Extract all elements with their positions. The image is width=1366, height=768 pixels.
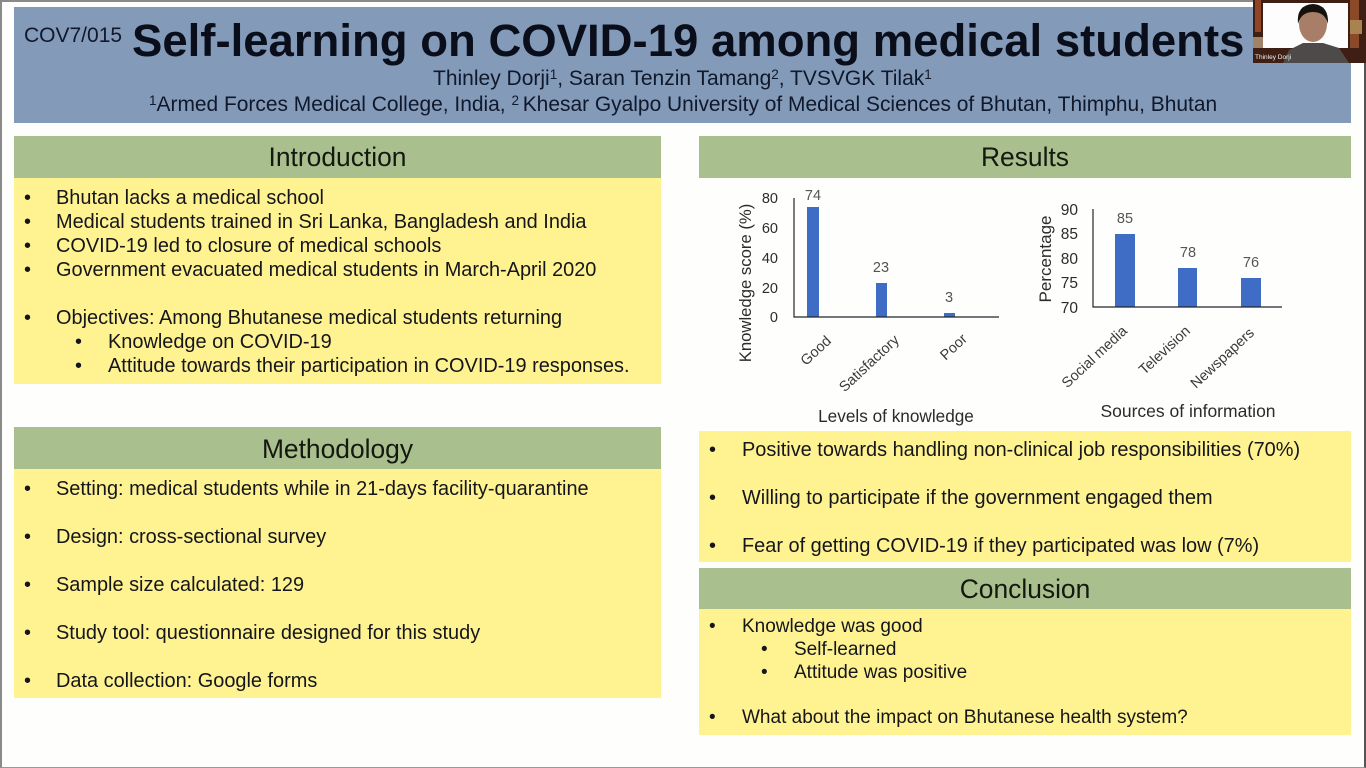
heading: methodology: Methodology [262,434,413,464]
bar chart: levels of knowledge: Knowledge score (%) [736,204,755,362]
bar chart: sources of information: 75 [1061,275,1078,292]
bar chart: sources of information: 70 [1061,300,1078,317]
bar chart: levels of knowledge: 60 [762,221,778,237]
introduction text block: Government evacuated medical students in March-April 2020 [56,259,596,281]
introduction text block: • [75,331,82,353]
bar chart: sources of information: 76 [1243,255,1259,271]
heading: conclusion: Conclusion [960,574,1090,604]
introduction text block: Objectives: Among Bhutanese medical students returning [56,307,562,329]
heading: results [699,136,1351,178]
heading: introduction [14,136,661,178]
bar chart: sources of information: 85 [1061,226,1078,243]
introduction text block: COVID-19 led to closure of medical schools [56,235,441,257]
title: Self-learning on COVID-19 among medical students [132,15,1244,66]
introduction text block: Medical students trained in Sri Lanka, Bangladesh and India [56,211,586,233]
bar chart: sources of information: 80 [1061,251,1078,268]
bar chart: levels of knowledge: Levels of knowledge [818,406,974,426]
panel: introduction [14,136,661,384]
results text block: • [709,487,716,509]
heading: introduction: Introduction [269,142,406,172]
conclusion text block: Knowledge was good [742,616,923,637]
conclusion text block [699,609,1351,735]
results text block: Willing to participate if the government engaged them [742,487,1213,509]
methodology text block: • [24,574,31,596]
bar chart: sources of information: Television [1136,323,1194,378]
icon: presenter webcam: Thinley Dorji [1255,54,1291,61]
methodology text block: • [24,526,31,548]
conclusion text block: • [761,639,768,660]
introduction text block: • [24,187,31,209]
introduction text block: • [75,355,82,377]
panel: conclusion [699,568,1351,735]
bar chart: sources of information [1036,202,1282,421]
bar chart: levels of knowledge: 0 [770,310,778,326]
bar chart: levels of knowledge: 40 [762,251,778,267]
results text block: • [709,535,716,557]
methodology text block: • [24,670,31,692]
bar chart: sources of information: Percentage [1036,216,1055,302]
methodology text block: • [24,622,31,644]
panel: title banner [14,7,1351,123]
heading: methodology [14,427,661,469]
affiliations: 1Armed Forces Medical College, India, 2 Khesar Gyalpo University of Medical Sciences of Bhutan, Thimphu, Bhutan [149,93,1217,116]
introduction text block [14,178,661,384]
introduction text block: • [24,307,31,329]
methodology text block: Setting: medical students while in 21-days facility-quarantine [56,478,589,500]
bar chart: levels of knowledge: 23 [873,260,889,276]
bar chart: levels of knowledge: 20 [762,281,778,297]
introduction text block: • [24,259,31,281]
authors: Thinley Dorji1, Saran Tenzin Tamang2, TVSVGK Tilak1 [433,67,932,90]
methodology text block: Study tool: questionnaire designed for this study [56,622,480,644]
methodology text block: • [24,478,31,500]
conclusion text block: • [709,616,716,637]
introduction text block: • [24,235,31,257]
heading: conclusion [699,568,1351,609]
bar chart: sources of information: Newspapers [1188,325,1258,392]
bar chart: levels of knowledge [736,188,999,426]
poster code: COV7/015 [24,24,122,47]
results text block: • [709,439,716,461]
methodology text block: Data collection: Google forms [56,670,317,692]
bar chart: levels of knowledge: Good [798,333,835,369]
bar chart: sources of information: 85 [1117,211,1133,227]
methodology text block: Design: cross-sectional survey [56,526,326,548]
bar chart: levels of knowledge: Satisfactory [836,332,903,396]
methodology text block [14,469,661,698]
methodology text block: Sample size calculated: 129 [56,574,304,596]
heading: results: Results [981,142,1069,172]
conclusion text block: What about the impact on Bhutanese health system? [742,707,1188,728]
bar chart: levels of knowledge: 74 [805,188,821,204]
conclusion text block: Attitude was positive [794,662,967,683]
introduction text block: Knowledge on COVID-19 [108,331,332,353]
bar chart: levels of knowledge: 80 [762,191,778,207]
bar chart: levels of knowledge: Poor [937,331,971,364]
bar chart: sources of information: Sources of information [1100,401,1276,421]
results text block [699,431,1351,562]
bar chart: sources of information: Social media [1059,323,1131,392]
bar chart: sources of information: 78 [1180,245,1196,261]
conclusion text block: Self-learned [794,639,896,660]
bar chart: levels of knowledge: 3 [945,290,953,306]
bar chart: sources of information: 90 [1061,202,1078,219]
introduction text block: Bhutan lacks a medical school [56,187,324,209]
results text block: Positive towards handling non-clinical job responsibilities (70%) [742,439,1300,461]
introduction text block: Attitude towards their participation in COVID-19 responses. [108,355,630,377]
icon: presenter webcam [1253,0,1366,63]
results text block: Fear of getting COVID-19 if they participated was low (7%) [742,535,1259,557]
introduction text block: • [24,211,31,233]
panel: methodology [14,427,661,698]
conclusion text block: • [709,707,716,728]
conclusion text block: • [761,662,768,683]
